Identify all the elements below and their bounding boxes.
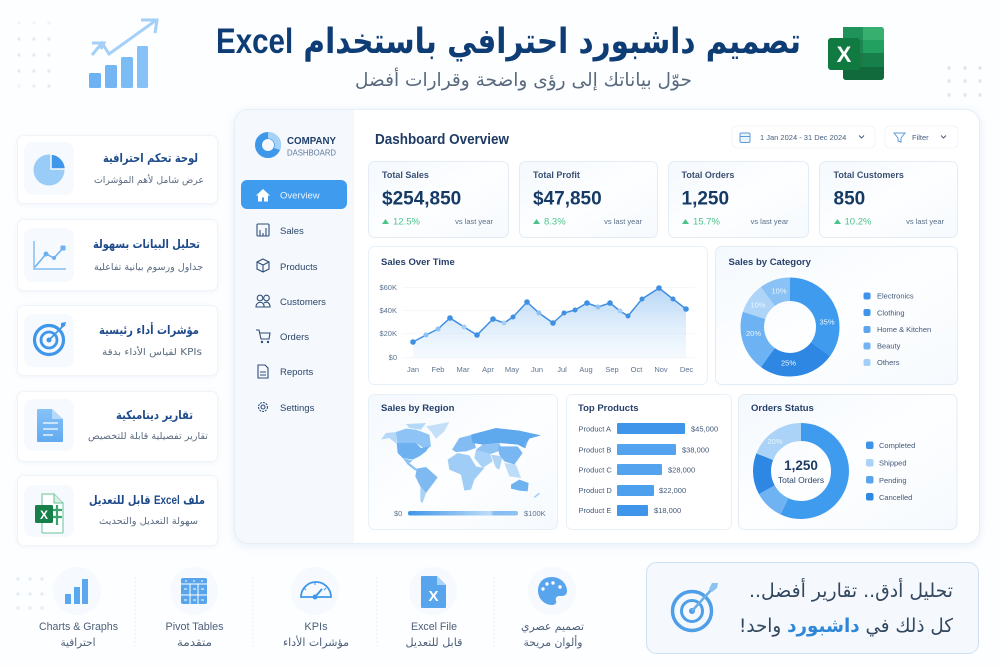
date range picker	[732, 126, 875, 148]
chart: sales over time: $40K	[379, 306, 397, 315]
filter dropdown: Filter	[912, 133, 929, 142]
chart: orders status donut: Completed	[879, 441, 915, 450]
filter dropdown	[885, 126, 958, 148]
KPI card: total sales: vs last year	[455, 217, 493, 226]
callout: كل ذلك في داشبورد واحد!	[739, 615, 954, 637]
chart: orders status donut	[738, 394, 957, 530]
chart: sales by region map: Sales by Region	[381, 403, 455, 414]
callout: تحليل أدق.. تقارير أفضل..	[749, 578, 953, 602]
chart: top products bars: $38,000	[682, 446, 709, 454]
nav: customers: Customers	[280, 297, 326, 308]
KPI card: total sales: $254,850	[382, 188, 461, 210]
chart: sales by category: 20%	[746, 329, 761, 338]
chart: orders status donut: 20%	[767, 437, 783, 446]
KPI card: total profit: $47,850	[533, 188, 602, 210]
logo	[258, 132, 336, 158]
chart: top products bars: Product A	[578, 424, 611, 434]
chart: sales by category: Clothing	[877, 308, 905, 318]
card: dynamic reports: تقارير تفصيلية قابلة للتخصيص	[88, 431, 208, 442]
card: easy data analysis: تحليل البيانات بسهولة	[93, 237, 200, 252]
chart: sales by category: 35%	[819, 318, 835, 326]
bottom feature: excel file	[406, 567, 462, 649]
callout	[646, 562, 978, 654]
logo: DASHBOARD	[287, 148, 336, 158]
chart: orders status donut: Cancelled	[879, 493, 912, 502]
nav: sales: Sales	[280, 226, 304, 237]
icon: Excel logo: X	[837, 42, 852, 67]
KPI card: total customers: vs last year	[906, 217, 944, 226]
card: easy data analysis: جداول ورسوم بيانية تفاعلية	[94, 262, 203, 273]
chart: top products bars: $18,000	[654, 506, 681, 515]
KPI card: total orders: vs last year	[751, 217, 789, 226]
chart: sales over time	[368, 246, 708, 384]
chart: sales over time: Sales Over Time	[381, 257, 455, 268]
chart: sales over time: Jul	[557, 365, 567, 374]
bottom feature: pivot tables	[166, 567, 224, 649]
bottom feature: modern design: تصميم عصري	[521, 620, 584, 633]
chart: sales over time: Aug	[579, 365, 593, 374]
nav: overview: Overview	[280, 190, 320, 202]
KPI card: total profit: 8.3%	[544, 216, 566, 228]
chart: sales by category: 10%	[771, 286, 787, 296]
nav: orders: Orders	[280, 332, 309, 343]
card: key performance indicators: KPIs لقياس الأداء بدقة	[102, 346, 202, 358]
nav: customers	[256, 295, 326, 308]
icon: target	[672, 583, 718, 630]
panel: dashboard	[234, 110, 980, 544]
KPI card: total sales	[368, 162, 508, 238]
bottom feature: charts and graphs: Charts & Graphs	[39, 621, 118, 633]
nav: products: Products	[280, 262, 318, 273]
bottom feature: modern design: وألوان مريحة	[524, 635, 582, 649]
chart: sales over time: Dec	[680, 365, 693, 374]
card: editable Excel file	[18, 476, 218, 546]
bottom feature: KPIs: مؤشرات الأداء	[283, 635, 349, 649]
chart: orders status donut: Shipped	[879, 458, 907, 468]
chart: top products bars: Product E	[578, 506, 611, 515]
panel: feature cards	[18, 136, 218, 546]
chart: sales over time: Apr	[482, 365, 494, 374]
card: dynamic reports: تقارير ديناميكية	[116, 408, 193, 422]
chart: sales by region map	[368, 394, 558, 530]
chart: top products bars: Product D	[578, 486, 612, 495]
bottom feature: charts and graphs	[39, 567, 118, 649]
chart: sales by category: Home & Kitchen	[877, 325, 931, 334]
card: editable Excel file: سهولة التعديل والتحديث	[99, 516, 198, 527]
chart: sales over time: Jan	[407, 365, 419, 374]
decorative dots: bottom left	[16, 577, 44, 610]
chart: sales over time: $60K	[379, 283, 397, 292]
bottom feature: excel file: Excel File	[411, 621, 457, 633]
chart: sales by category: 25%	[781, 358, 796, 368]
nav: products	[257, 259, 318, 273]
bottom feature: modern design	[521, 567, 584, 649]
card: dynamic reports	[18, 392, 218, 462]
card: editable Excel file: X	[40, 508, 48, 522]
chart: sales by category: 10%	[750, 300, 766, 310]
chart: orders status donut: Pending	[879, 476, 907, 485]
KPI card: total customers: 10.2%	[844, 216, 872, 228]
sidebar	[235, 110, 354, 543]
chart: sales over time: Oct	[631, 365, 643, 374]
chart: top products bars: Product C	[578, 466, 612, 474]
icon: growth chart with arrow	[89, 20, 157, 88]
title: تصميم داشبورد احترافي باستخدام Excel	[216, 22, 801, 62]
chart: sales over time: May	[505, 365, 519, 374]
chart: sales over time: $0	[389, 353, 397, 362]
bottom feature: excel file: X	[428, 588, 439, 605]
chart: orders status donut: Orders Status	[751, 403, 814, 414]
chart: sales by category: Beauty	[877, 342, 901, 350]
KPI card: total sales: Total Sales	[382, 170, 429, 180]
chart: sales over time: Nov	[654, 365, 668, 374]
bottom feature: KPIs: KPIs	[304, 621, 328, 633]
chart: sales over time: Sep	[605, 365, 619, 374]
nav: orders	[256, 330, 309, 343]
nav: settings	[258, 402, 315, 414]
bottom feature: excel file: قابل للتعديل	[406, 636, 462, 649]
chart: sales over time: Jun	[531, 365, 543, 374]
KPI card: total profit	[520, 162, 658, 238]
KPI card: total sales: 12.5%	[393, 216, 420, 228]
chart: sales by category: Others	[877, 358, 900, 367]
chart: top products bars: $28,000	[668, 466, 695, 474]
chart: sales by category: Sales by Category	[728, 257, 812, 268]
chart: sales by category	[716, 246, 958, 384]
bottom feature: KPIs	[283, 567, 349, 649]
chart: sales by category: Electronics	[877, 292, 914, 300]
dashboard heading: Dashboard Overview	[375, 132, 510, 148]
bottom feature: charts and graphs: احترافية	[60, 636, 96, 649]
chart: top products bars: Product B	[578, 446, 611, 454]
subtitle: حوّل بياناتك إلى رؤى واضحة وقرارات أفضل	[355, 67, 692, 91]
KPI card: total orders: 1,250	[682, 188, 729, 210]
chart: sales over time: $20K	[379, 329, 397, 338]
nav: reports: Reports	[280, 367, 314, 378]
nav: reports	[258, 365, 314, 378]
card: editable Excel file: ملف Excel قابل للتعديل	[89, 493, 205, 507]
nav: overview	[241, 180, 347, 209]
card: professional dashboard	[18, 136, 218, 204]
chart: top products bars: Top Products	[578, 403, 639, 414]
date range picker: 1 Jan 2024 - 31 Dec 2024	[760, 133, 846, 142]
KPI card: total orders	[668, 162, 808, 238]
chart: orders status donut: Total Orders	[778, 475, 824, 485]
logo: COMPANY	[287, 136, 336, 147]
decorative dots: top left	[17, 21, 51, 88]
KPI card: total orders: 15.7%	[693, 216, 720, 228]
decorative dots: top right	[947, 66, 982, 97]
chart: sales by region map: $100K	[524, 509, 546, 518]
card: easy data analysis	[18, 220, 218, 290]
bottom feature: pivot tables: متقدمة	[177, 636, 212, 649]
chart: sales by region map: $0	[394, 509, 402, 518]
KPI card: total profit: vs last year	[604, 217, 642, 226]
card: professional dashboard: لوحة تحكم احترافية	[103, 151, 198, 166]
card: professional dashboard: عرض شامل لأهم المؤشرات	[94, 174, 204, 186]
nav: sales	[257, 224, 304, 237]
KPI card: total customers	[820, 162, 958, 238]
chart: top products bars: $22,000	[659, 486, 686, 495]
icon: Excel logo	[828, 27, 884, 80]
chart: sales over time: Mar	[457, 365, 470, 374]
KPI card: total profit: Total Profit	[533, 170, 580, 180]
chart: top products bars: $45,000	[691, 424, 718, 434]
KPI card: total orders: Total Orders	[682, 170, 734, 180]
KPI card: total customers: 850	[834, 188, 865, 210]
bottom feature: pivot tables: Pivot Tables	[166, 621, 224, 633]
card: key performance indicators: مؤشرات أداء رئيسية	[99, 322, 199, 338]
chart: sales over time: Feb	[432, 365, 444, 374]
chart: top products bars	[566, 394, 732, 530]
chart: orders status donut: 1,250	[784, 458, 818, 473]
card: key performance indicators	[18, 306, 218, 376]
KPI card: total customers: Total Customers	[834, 170, 904, 180]
nav: settings: Settings	[280, 403, 315, 414]
